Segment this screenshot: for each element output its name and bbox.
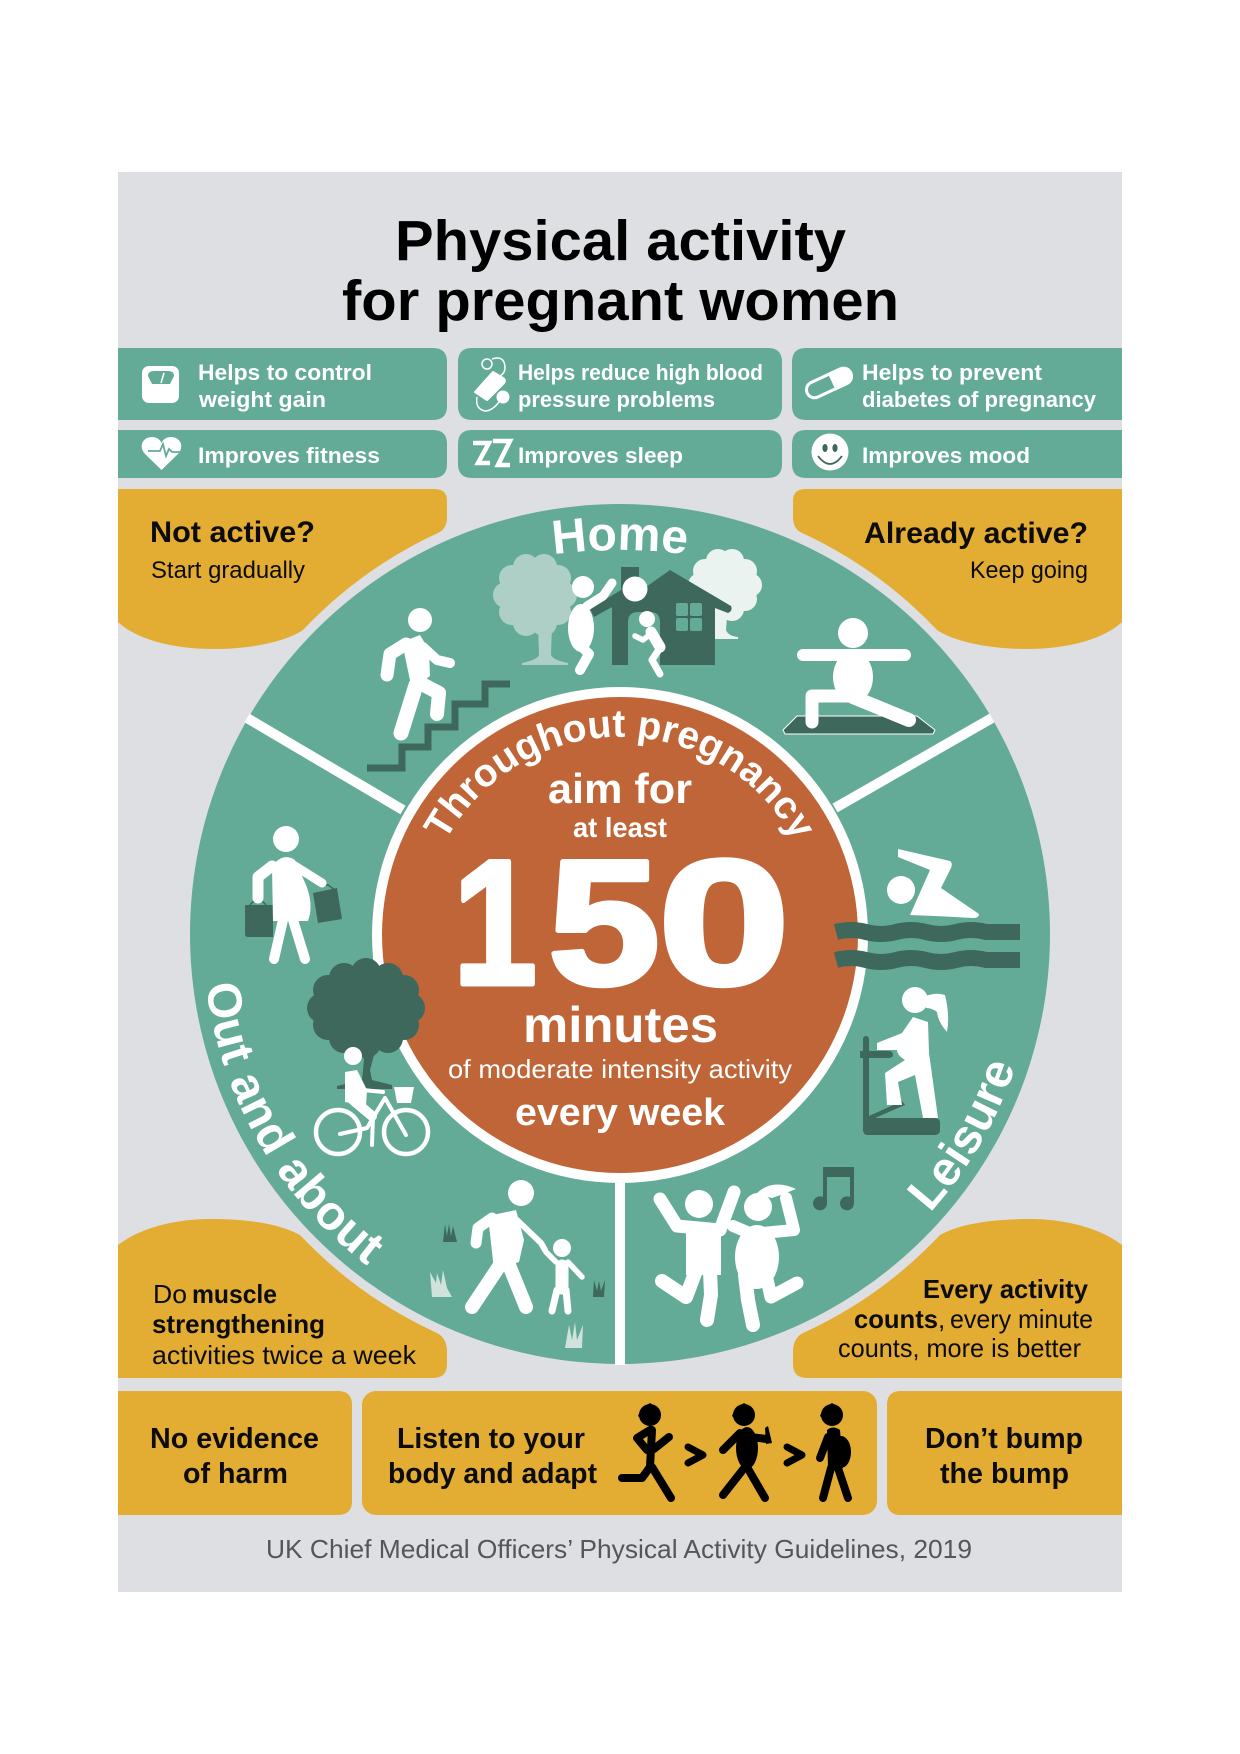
central message (422, 711, 812, 1134)
callout: already active: Already active? (864, 517, 1088, 550)
icon: woman climbing stairs (367, 608, 510, 768)
box: no evidence of harm (118, 1391, 352, 1515)
title: for pregnant women (342, 269, 899, 333)
icon: woman on treadmill (860, 987, 948, 1135)
icon: cyclist (316, 1047, 428, 1154)
icon: yoga pose on mat (783, 618, 935, 734)
background panel (118, 172, 1122, 1592)
benefit: blood pressure: Helps reduce high blood (518, 360, 763, 385)
benefit: prevent diabetes (792, 348, 1122, 420)
icon: heart with pulse (142, 437, 181, 470)
callout: not active: Start gradually (151, 557, 305, 584)
number: 150 (453, 823, 790, 1022)
icon: music note (813, 1167, 854, 1210)
callout: muscle strengthening: muscle (192, 1279, 277, 1309)
callout: not active: Not active? (150, 516, 315, 549)
title: Physical activity (395, 209, 846, 273)
icon: parent and child walking (472, 1180, 582, 1311)
number: 150: 1 (453, 823, 537, 1022)
icon: smiley face (812, 434, 848, 470)
icon: weighing scale (142, 366, 179, 403)
icon: chevron (688, 1447, 703, 1463)
box: listen to your body: Listen to your (397, 1423, 585, 1455)
callout: not active (118, 489, 447, 649)
icon: ZZ sleep (473, 441, 510, 465)
icon: runner silhouette (622, 1403, 671, 1498)
benefit: improves mood (792, 430, 1122, 478)
callout: every activity counts: counts, more is better (838, 1333, 1081, 1363)
icon: woman shopping (245, 826, 342, 959)
activity wheel (190, 504, 1050, 1365)
benefit: improves fitness (118, 430, 447, 478)
text: aim for: aim for (548, 765, 692, 812)
callout: muscle strengthening: activities twice a week (152, 1340, 417, 1370)
icon: home scene with trees, house and family (493, 549, 762, 674)
label: Leisure: Leisure (906, 1062, 1013, 1211)
heading arc: Throughout pregnancy: Throughout pregnancy (422, 711, 812, 835)
callout: every activity counts: Every activity (923, 1274, 1089, 1304)
box: don't bump the bump (887, 1391, 1122, 1515)
callout: already active: Keep going (970, 557, 1088, 584)
benefit: blood pressure (458, 348, 782, 420)
benefit: improves sleep (458, 430, 782, 478)
label: Home: Home (553, 518, 686, 554)
source line: UK Chief Medical Officers’ Physical Activity Guidelines, 2019 (266, 1534, 972, 1564)
box: listen to your body: body and adapt (388, 1458, 597, 1490)
icon: pregnant silhouette (820, 1403, 851, 1498)
icon: grass tufts (430, 1224, 605, 1348)
callout: already active (793, 489, 1122, 649)
callout: every activity counts: counts (854, 1304, 938, 1334)
icon: walker silhouette (723, 1403, 772, 1498)
box: don't bump the bump: the bump (940, 1458, 1069, 1490)
box: no evidence of harm: No evidence (150, 1423, 319, 1455)
benefit: control weight gain: Helps to control (198, 360, 372, 385)
number: 150: 5 (548, 823, 660, 1022)
benefit: improves fitness: Improves fitness (198, 443, 380, 468)
callout: muscle strengthening: Do (153, 1279, 187, 1309)
callout: every activity counts: every minute (950, 1304, 1093, 1334)
icon: swimmer and waves (836, 849, 1020, 962)
icon: blood pressure cuff (475, 358, 510, 411)
benefit: prevent diabetes: diabetes of pregnancy (862, 387, 1097, 412)
text: minutes: minutes (523, 997, 718, 1053)
label: Out and about: Out and about (208, 984, 382, 1266)
box: don't bump the bump: Don’t bump (925, 1423, 1083, 1455)
icon: chevron (787, 1447, 802, 1463)
callout: every activity counts (793, 1219, 1122, 1378)
benefit: control weight gain: weight gain (198, 387, 326, 412)
benefit: improves mood: Improves mood (862, 443, 1030, 468)
benefit: blood pressure: pressure problems (518, 387, 715, 412)
box: listen to your body (362, 1391, 877, 1515)
icon: two people dancing (660, 1185, 797, 1325)
benefit: prevent diabetes: Helps to prevent (862, 360, 1043, 385)
text: at least: at least (573, 812, 667, 843)
number: 150: 0 (658, 823, 790, 1022)
benefit: improves sleep: Improves sleep (518, 443, 683, 468)
icon: capsule pill (803, 364, 856, 402)
benefit: control weight gain (118, 348, 447, 420)
callout: muscle strengthening (118, 1219, 447, 1378)
callout: every activity counts: , (938, 1304, 945, 1334)
callout: muscle strengthening: strengthening (152, 1309, 325, 1339)
text: every week: every week (515, 1092, 726, 1134)
icon: tree (307, 958, 425, 1089)
box: no evidence of harm: of harm (183, 1458, 288, 1490)
title (342, 209, 899, 333)
text: of moderate intensity activity: of moderate intensity activity (448, 1054, 792, 1084)
